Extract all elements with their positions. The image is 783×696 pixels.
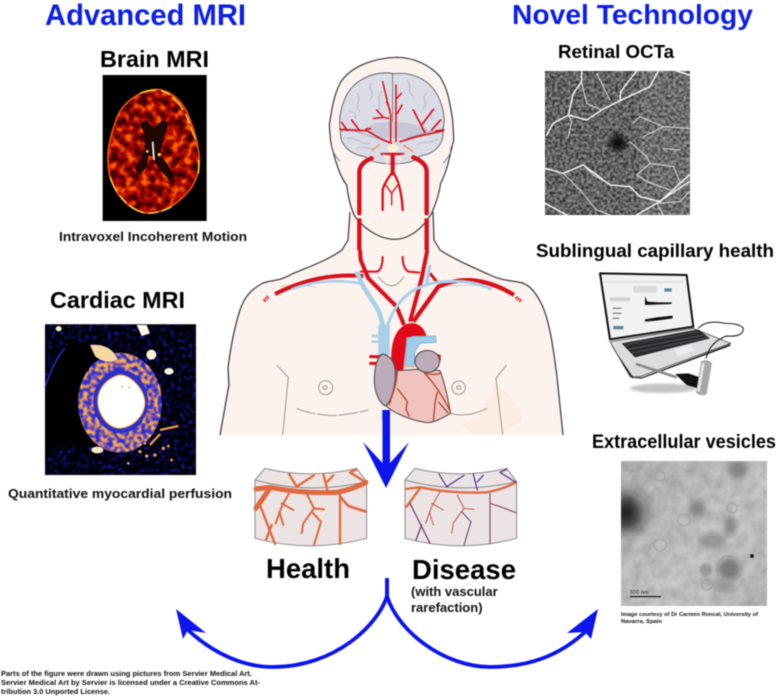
image: retinal OCT angiography (545, 71, 690, 215)
footer: attribution: tribution 3.0 Unported License. (1, 687, 110, 696)
right curved arrow (387, 578, 598, 667)
heading: Brain MRI: Brain MRI (100, 46, 209, 72)
large blue down arrow (363, 410, 409, 488)
chest lines (277, 277, 507, 435)
panel: disease capillaries with rarefaction (405, 468, 517, 546)
left curved arrow (176, 578, 387, 667)
icon: laptop with sublingual microscope probe (600, 273, 743, 395)
torso skin (220, 212, 563, 435)
caption: image courtesy: Image courtesy of Dr Carmen Roncal, University of (621, 612, 758, 618)
brain (340, 73, 444, 164)
image: electron micrograph of extracellular vesicles (610, 460, 767, 606)
chest shading (460, 383, 522, 435)
heading: Retinal OCTa: Retinal OCTa (558, 42, 675, 62)
head (329, 57, 454, 250)
circle of Willis (383, 143, 404, 191)
arteries and veins of the chest (264, 250, 522, 423)
heading: Cardiac MRI: Cardiac MRI (50, 287, 185, 313)
image: cardiac perfusion map (45, 324, 196, 475)
label: Disease: Disease (412, 554, 516, 585)
human figure (220, 57, 563, 435)
panel: health capillaries (255, 468, 367, 546)
heading: Extracellular vesicles: Extracellular vesicles (592, 432, 776, 453)
caption: Quantitative myocardial perfusion: Quantitative myocardial perfusion (8, 486, 232, 501)
caption: Intravoxel Incoherent Motion: Intravoxel Incoherent Motion (59, 230, 247, 244)
footer: attribution: Parts of the figure were drawn using pictures from Servier Medical Art. (1, 669, 252, 678)
footer: attribution: Servier Medical Art by Servier is licensed under a Creative Commons At- (1, 678, 260, 687)
image: brain MRI perfusion map (103, 75, 207, 221)
heading: Sublingual capillary health: Sublingual capillary health (536, 241, 774, 261)
scale bar label: 500 nm (630, 590, 649, 596)
caption: image courtesy: Navarra, Spain (621, 619, 662, 625)
label: with vascular rarefaction: (with vascular (411, 584, 498, 599)
torso outline (220, 212, 563, 435)
neck arteries and cerebral vessels (340, 82, 444, 250)
label: Health: Health (266, 553, 350, 584)
heart (369, 323, 451, 423)
branching blue arrows (176, 578, 598, 667)
label: with vascular rarefaction: rarefaction) (411, 600, 483, 615)
